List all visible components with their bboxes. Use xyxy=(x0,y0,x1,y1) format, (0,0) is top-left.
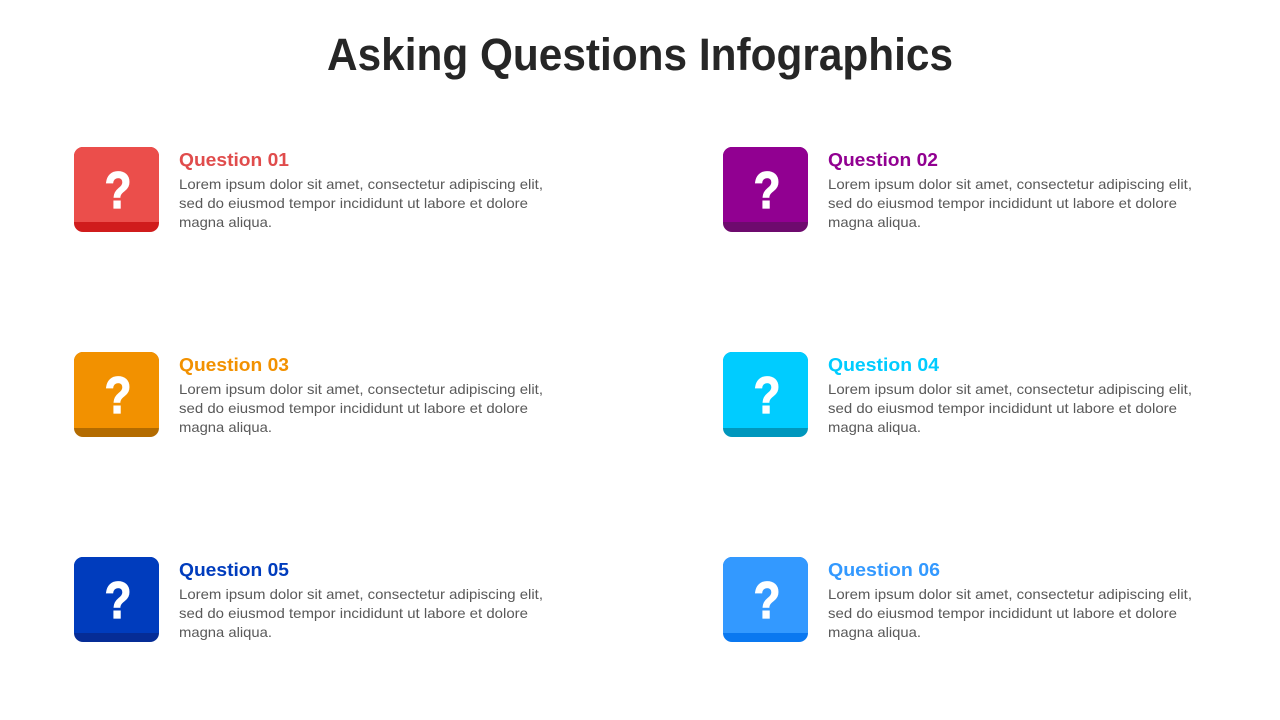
text block: question 03: magna aliqua. xyxy=(179,419,272,435)
text block: question 02: magna aliqua. xyxy=(828,214,921,230)
text block: question 03: Lorem ipsum dolor sit amet, consectetur adipiscing elit, xyxy=(179,381,543,397)
panel: question 06 xyxy=(723,557,1192,642)
text block: question 05: sed do eiusmod tempor incididunt ut labore et dolore xyxy=(179,605,528,621)
heading: question 06: Question 06 xyxy=(828,559,940,580)
panel: question 05 xyxy=(74,557,543,642)
text block: question 06: magna aliqua. xyxy=(828,624,921,640)
heading: question 04: Question 04 xyxy=(828,354,940,375)
text block: question 01 xyxy=(179,176,543,230)
text block: question 04 xyxy=(828,381,1192,435)
text block: question 05: Lorem ipsum dolor sit amet, consectetur adipiscing elit, xyxy=(179,586,543,602)
text block: question 01: Lorem ipsum dolor sit amet, consectetur adipiscing elit, xyxy=(179,176,543,192)
panel: question 03 xyxy=(74,352,543,437)
heading: question 02: Question 02 xyxy=(828,149,938,170)
heading: question 05: Question 05 xyxy=(179,559,289,580)
icon: red question tile xyxy=(74,147,159,232)
panel: question 01 xyxy=(74,147,543,232)
text block: question 04: sed do eiusmod tempor incididunt ut labore et dolore xyxy=(828,400,1177,416)
icon: blue question tile: ? xyxy=(753,572,781,630)
text block: question 01: sed do eiusmod tempor incididunt ut labore et dolore xyxy=(179,195,528,211)
panel: question 02 xyxy=(723,147,1192,232)
text block: question 03 xyxy=(179,381,543,435)
text block: question 06: sed do eiusmod tempor incididunt ut labore et dolore xyxy=(828,605,1177,621)
text block: question 01: magna aliqua. xyxy=(179,214,272,230)
icon: navy question tile xyxy=(74,557,159,642)
text block: question 04: magna aliqua. xyxy=(828,419,921,435)
text block: question 05: magna aliqua. xyxy=(179,624,272,640)
panel: question 04 xyxy=(723,352,1192,437)
text block: question 05 xyxy=(179,586,543,640)
text block: question 02 xyxy=(828,176,1192,230)
icon: navy question tile: ? xyxy=(104,572,132,630)
text block: question 02: sed do eiusmod tempor incididunt ut labore et dolore xyxy=(828,195,1177,211)
heading: question 01: Question 01 xyxy=(179,149,289,170)
heading: question 03: Question 03 xyxy=(179,354,289,375)
icon: orange question tile xyxy=(74,352,159,437)
icon: cyan question tile: ? xyxy=(753,367,781,425)
icon: purple question tile: ? xyxy=(753,162,781,220)
icon: orange question tile: ? xyxy=(104,367,132,425)
text block: question 06: Lorem ipsum dolor sit amet, consectetur adipiscing elit, xyxy=(828,586,1192,602)
text block: question 06 xyxy=(828,586,1192,640)
icon: cyan question tile xyxy=(723,352,808,437)
text block: question 02: Lorem ipsum dolor sit amet, consectetur adipiscing elit, xyxy=(828,176,1192,192)
icon: purple question tile xyxy=(723,147,808,232)
icon: blue question tile xyxy=(723,557,808,642)
icon: red question tile: ? xyxy=(104,162,132,220)
title: Asking Questions Infographics xyxy=(327,29,953,80)
text block: question 04: Lorem ipsum dolor sit amet, consectetur adipiscing elit, xyxy=(828,381,1192,397)
text block: question 03: sed do eiusmod tempor incididunt ut labore et dolore xyxy=(179,400,528,416)
